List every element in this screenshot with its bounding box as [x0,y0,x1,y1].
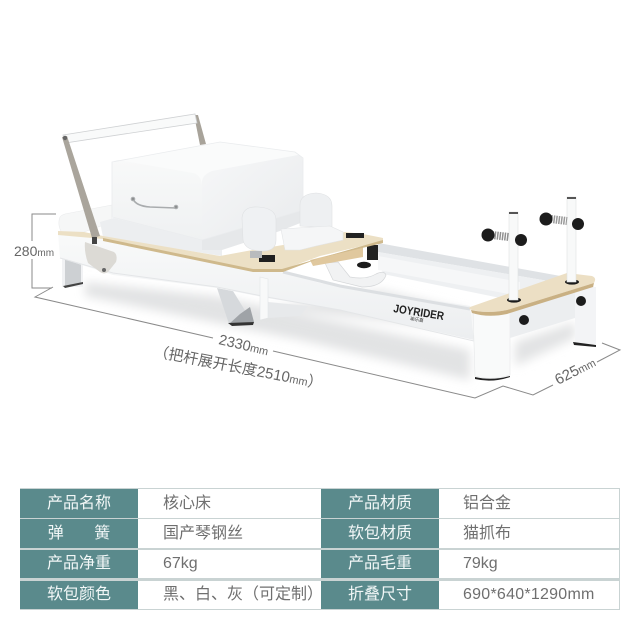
wooden end plate [469,273,595,316]
row 1: 核心床 [163,495,211,512]
left back leg [62,250,83,288]
row 1: 产品名称 [47,495,111,512]
end cross bar [510,286,594,338]
foot bar knobs and springs [482,212,584,246]
row 3: 67kg [163,555,198,572]
dimension: length 2330mm [35,287,620,398]
row 3 [20,550,619,578]
far side rail [378,243,566,300]
middle angled leg [217,288,308,326]
under-deck wood and clamp [310,245,378,268]
row 3: 产品净重 [47,555,111,572]
black clamp on deck [346,233,364,238]
row 4: 软包颜色 [47,586,111,603]
dimension: length 2330mm: （把杆展开长度2510mm） [152,343,324,393]
end frame knobs [519,296,586,325]
row 3: 79kg [463,555,498,572]
row 2 [20,519,619,548]
dimension: length 2330mm: 2330mm [217,332,270,359]
shoulder rests [242,193,343,262]
row 1 [20,489,619,518]
brand logo: 瑜乐嘉 [410,315,425,324]
row 4: 690*640*1290mm [463,586,595,603]
near right leg [473,311,510,378]
specification table [20,488,620,610]
dimension: height 280mm [14,214,56,288]
row 2: 猫抓布 [463,525,511,542]
row 3: 产品毛重 [348,555,412,572]
foot bar posts [507,197,579,303]
brand logo: JOYRIDER [393,303,445,323]
white cross tube [325,262,386,287]
main near rail frame [58,233,474,341]
row 4: 黑、白、灰（可定制） [163,586,323,603]
row 4 [20,581,619,609]
box handle [132,198,178,208]
dimension: width 625mm: 625mm [552,354,598,389]
white box [112,142,303,250]
push bar handle [62,114,206,274]
reformer machine illustration [58,114,596,381]
row 1: 产品材质 [348,495,412,512]
carriage wood deck [58,231,383,272]
carriage pad left [59,205,222,256]
row 2: 国产琴钢丝 [163,525,243,542]
row 2: 软包材质 [348,525,412,542]
dimension: height 280mm: 280mm [14,243,54,259]
row 4: 折叠尺寸 [348,586,412,603]
far right leg [573,287,596,347]
row 1: 铝合金 [463,495,511,512]
floor shadows [85,282,575,380]
leg foot [475,376,510,381]
row 2: 弹 簧 [48,525,110,542]
